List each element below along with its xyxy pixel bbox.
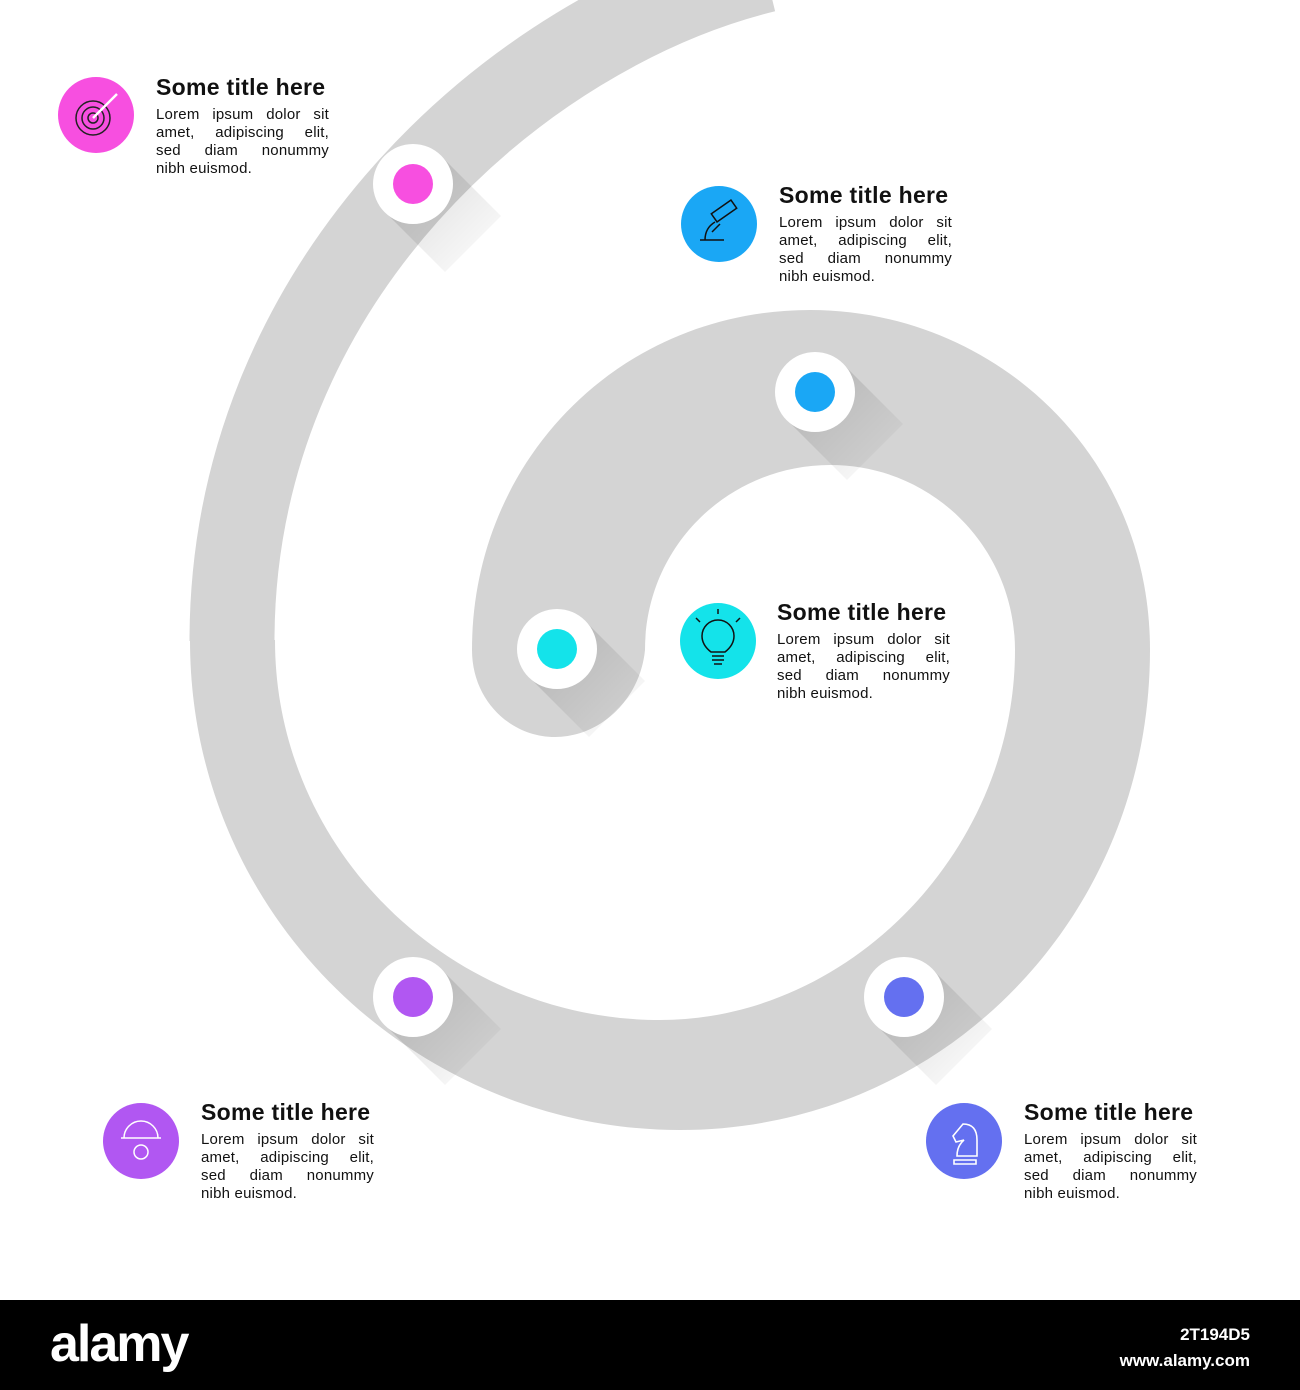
text block 2: Lorem ipsum dolor sit	[779, 214, 952, 231]
text block 4: nibh euismod.	[201, 1185, 297, 1202]
text block 1: sed diam nonummy	[156, 142, 329, 159]
text block 5: sed diam nonummy	[1024, 1167, 1197, 1184]
footer bar: www.alamy.com	[1120, 1351, 1250, 1370]
icon: lightbulb	[680, 603, 756, 679]
text block 2	[779, 182, 952, 285]
footer bar	[0, 1300, 1300, 1390]
footer bar: alamy	[50, 1315, 187, 1373]
text block 5: Some title here	[1024, 1099, 1193, 1125]
text block 2: nibh euismod.	[779, 268, 875, 285]
text block 4: Some title here	[201, 1099, 370, 1125]
marker: purple	[373, 957, 501, 1085]
text block 4: Lorem ipsum dolor sit	[201, 1131, 374, 1148]
text block 2: amet, adipiscing elit,	[779, 232, 952, 249]
text block 3: sed diam nonummy	[777, 667, 950, 684]
text block 3	[777, 599, 950, 702]
text block 4: amet, adipiscing elit,	[201, 1149, 374, 1166]
text block 3: Some title here	[777, 599, 946, 625]
text block 1: nibh euismod.	[156, 160, 252, 177]
footer bar: 2T194D5	[1180, 1325, 1250, 1344]
text block 5: Lorem ipsum dolor sit	[1024, 1131, 1197, 1148]
text block 3: amet, adipiscing elit,	[777, 649, 950, 666]
marker: pink	[373, 144, 501, 272]
text block 4	[201, 1099, 374, 1202]
text block 3: nibh euismod.	[777, 685, 873, 702]
text block 2: Some title here	[779, 182, 948, 208]
text block 3: Lorem ipsum dolor sit	[777, 631, 950, 648]
text block 1: Lorem ipsum dolor sit	[156, 106, 329, 123]
marker: blue	[775, 352, 903, 480]
icon: microscope	[681, 186, 757, 262]
text block 5: amet, adipiscing elit,	[1024, 1149, 1197, 1166]
spiral band	[190, 0, 1150, 1130]
marker: indigo	[864, 957, 992, 1085]
icon: chess knight	[926, 1103, 1002, 1179]
text block 1: Some title here	[156, 74, 325, 100]
text block 5: nibh euismod.	[1024, 1185, 1120, 1202]
icon: helmet gear	[103, 1103, 179, 1179]
text block 1	[156, 74, 329, 177]
text block 5	[1024, 1099, 1197, 1202]
text block 2: sed diam nonummy	[779, 250, 952, 267]
text block 4: sed diam nonummy	[201, 1167, 374, 1184]
marker: cyan	[517, 609, 645, 737]
text block 1: amet, adipiscing elit,	[156, 124, 329, 141]
icon: target	[58, 77, 134, 153]
